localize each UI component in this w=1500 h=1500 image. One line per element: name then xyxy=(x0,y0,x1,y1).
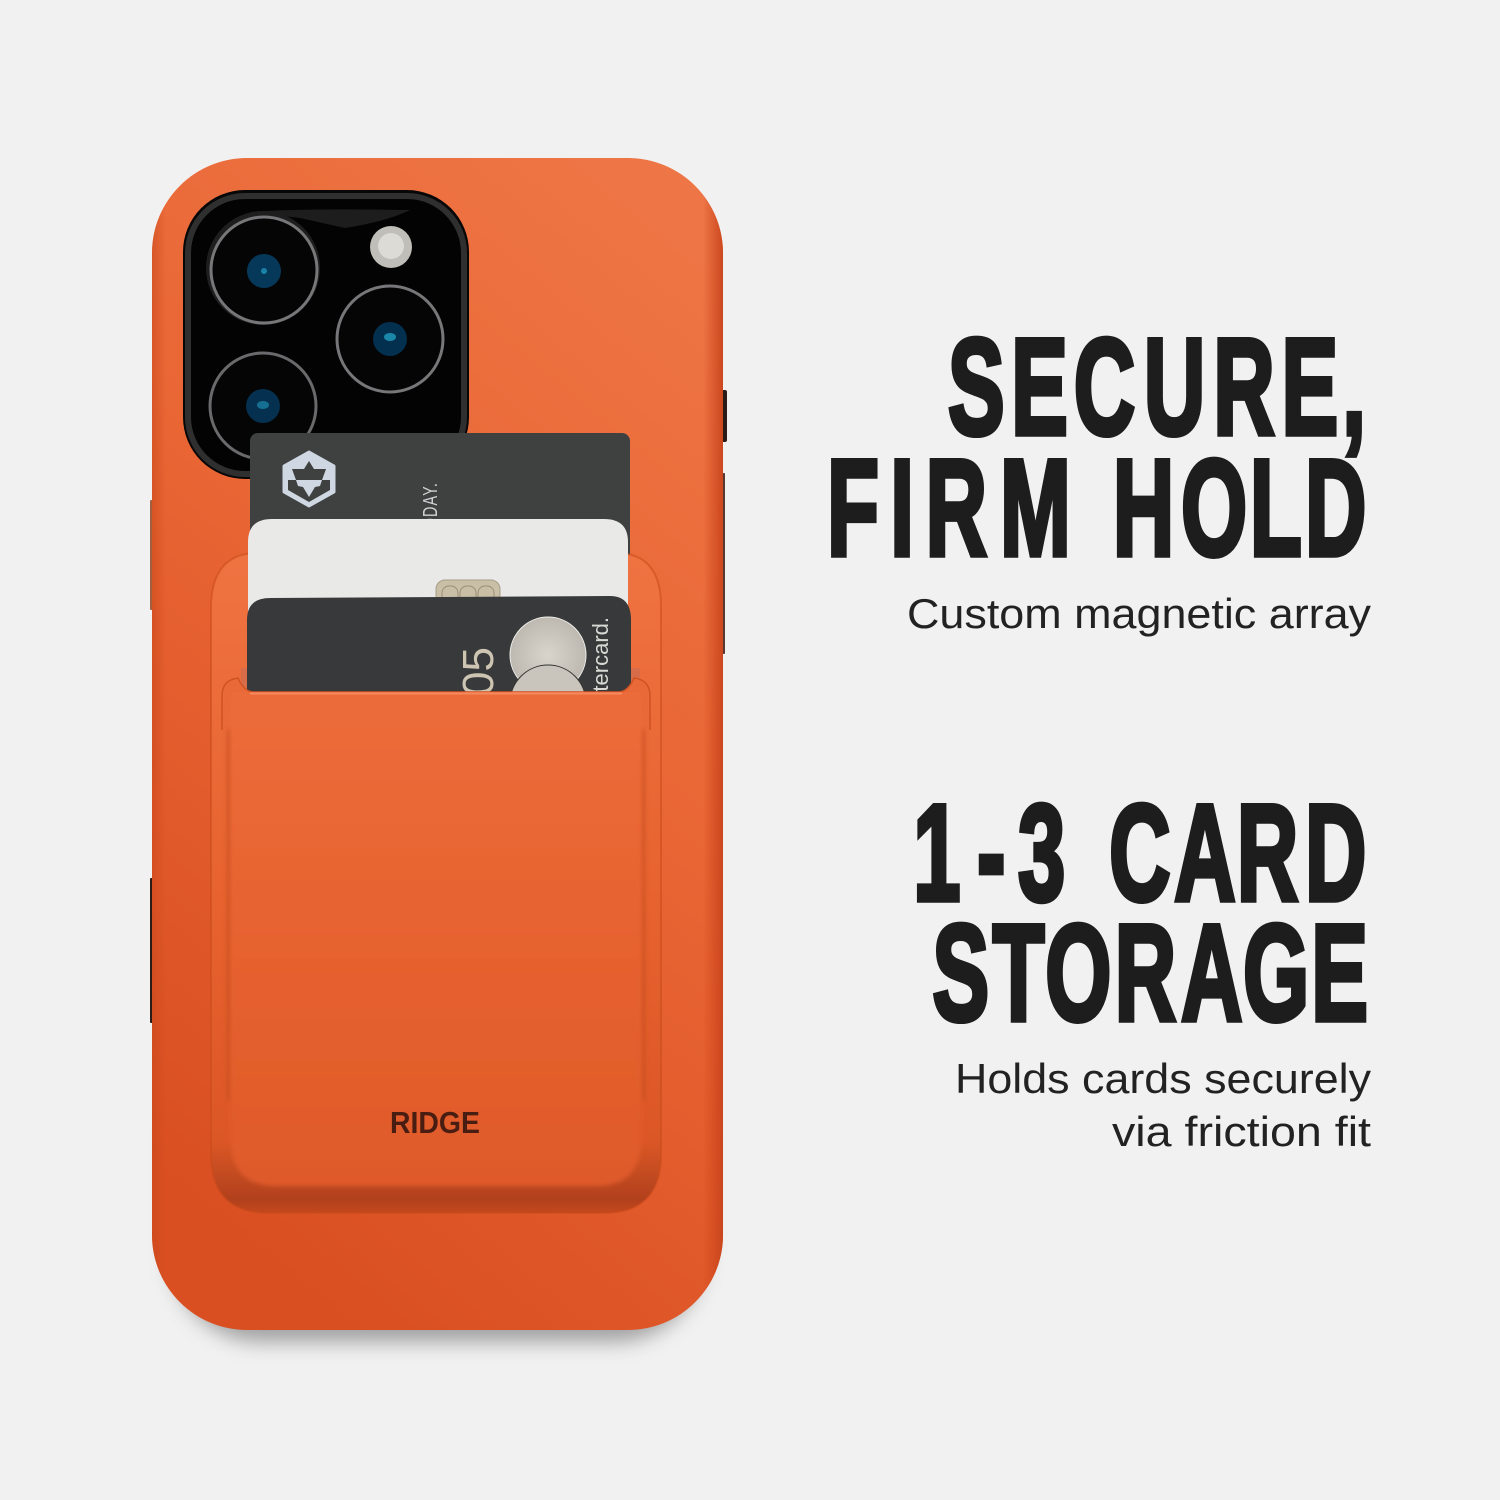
heading xyxy=(913,777,1368,1050)
phone drop shadow xyxy=(170,1060,705,1342)
heading: SECURE, xyxy=(948,311,1366,464)
phone with case xyxy=(150,158,727,1330)
card number: 05 xyxy=(454,647,503,696)
case body xyxy=(152,158,723,1330)
wallet back plate xyxy=(211,553,661,1216)
heading: FIRM HOLD xyxy=(827,432,1366,585)
caption xyxy=(955,1055,1371,1155)
lens: main xyxy=(206,211,320,325)
product infographic canvas xyxy=(150,158,1371,1354)
pocket notches xyxy=(241,668,640,692)
lens: right xyxy=(337,286,443,392)
camera island xyxy=(183,190,469,479)
card logo xyxy=(284,452,334,506)
side buttons xyxy=(150,390,727,1023)
card chip xyxy=(436,580,500,604)
caption: Holds cards securely xyxy=(955,1055,1371,1102)
front card xyxy=(247,596,631,741)
feature two xyxy=(913,777,1371,1155)
flash xyxy=(370,226,412,268)
card network circles xyxy=(510,617,586,741)
wallet front pocket xyxy=(222,678,650,1186)
feature one xyxy=(827,311,1371,637)
card text: TODAY. xyxy=(419,482,442,539)
white card xyxy=(248,519,628,692)
heading xyxy=(827,311,1366,585)
heading: 1-3 CARD xyxy=(913,777,1366,930)
caption: Custom magnetic array xyxy=(907,590,1371,637)
brand name: RIDGE xyxy=(390,1105,480,1140)
heading: STORAGE xyxy=(932,897,1368,1050)
caption: via friction fit xyxy=(1112,1108,1371,1155)
lens: bottom xyxy=(210,353,316,459)
card network name: tercard. xyxy=(588,617,613,692)
back card xyxy=(250,433,630,573)
